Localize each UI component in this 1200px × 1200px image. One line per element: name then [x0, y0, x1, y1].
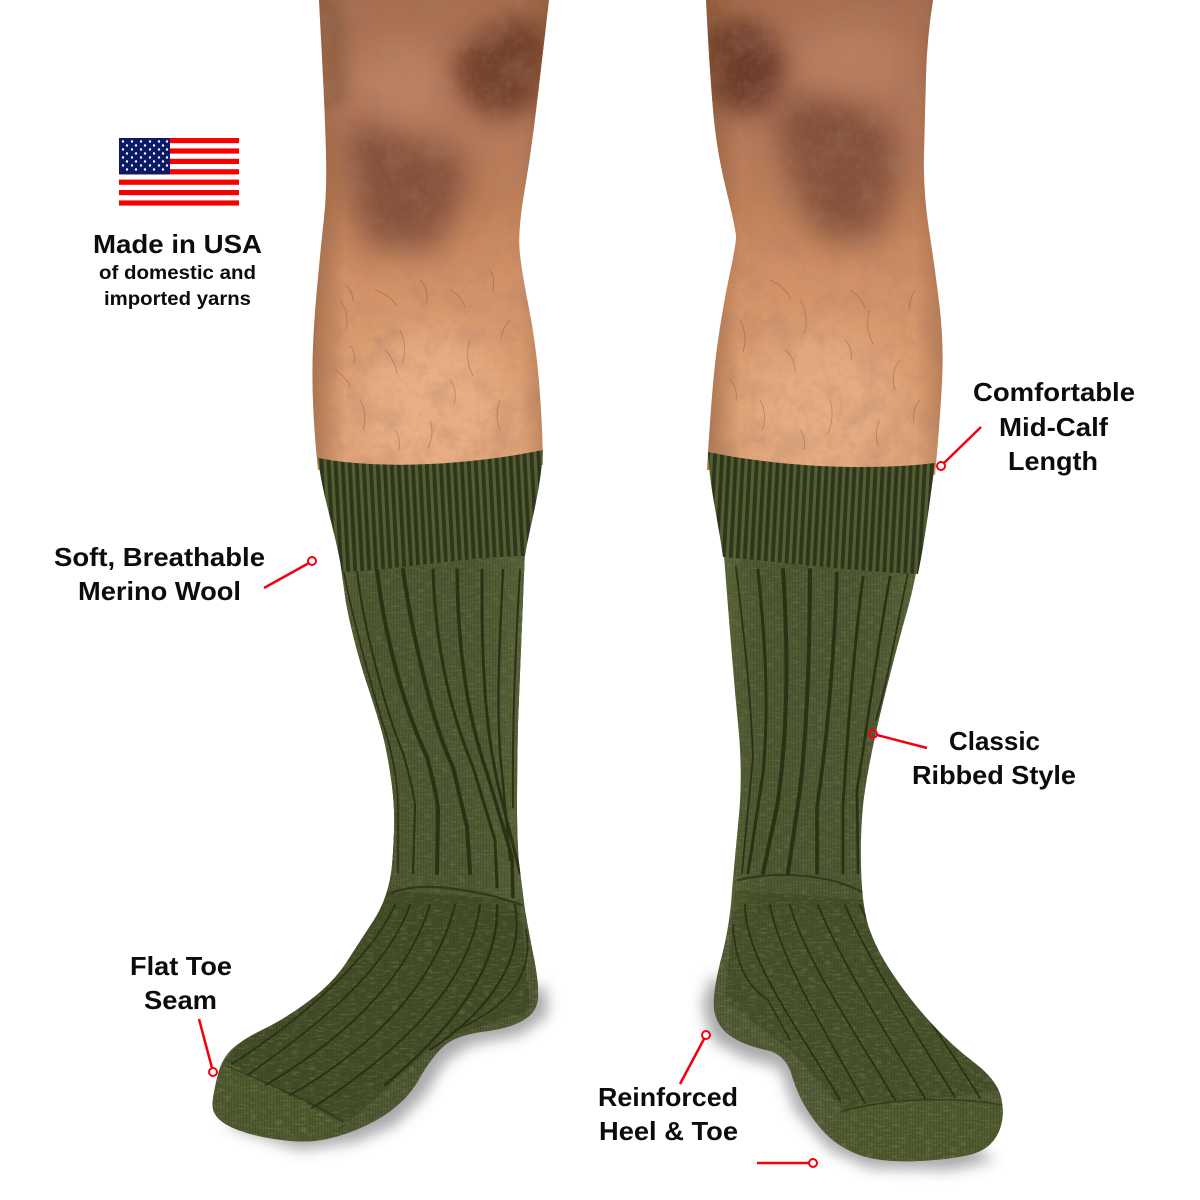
- icon: american flag: [119, 138, 239, 206]
- callout: soft breathable merino wool: Merino Wool: [78, 576, 241, 606]
- left sock ribs: [227, 567, 528, 1122]
- text: made in usa: imported yarns: [104, 289, 251, 310]
- callout: classic ribbed style: Ribbed Style: [912, 760, 1076, 790]
- callout: reinforced heel and toe: Heel & Toe: [599, 1116, 738, 1146]
- text: made in usa: Made in USA: [93, 229, 262, 259]
- callout: flat toe seam: Seam: [144, 985, 217, 1015]
- callout: flat toe seam: Flat Toe: [130, 951, 232, 981]
- left foot shadow: [225, 985, 548, 1150]
- callout: comfortable mid-calf length: [937, 377, 1135, 476]
- callout: soft breathable merino wool: [54, 542, 316, 606]
- right sock body: [714, 557, 1003, 1162]
- left sock cuff: [318, 450, 543, 572]
- right sock cuff: [708, 452, 935, 574]
- left sock body: [212, 556, 538, 1142]
- left leg: [312, 0, 549, 470]
- callout: classic ribbed style: Classic: [949, 726, 1040, 756]
- callout: soft breathable merino wool: Soft, Breathable: [54, 542, 265, 572]
- callout: comfortable mid-calf length: Mid-Calf: [999, 412, 1108, 442]
- text: made in usa: [93, 229, 262, 310]
- right sock: [700, 452, 1020, 1170]
- callout: classic ribbed style: [869, 726, 1076, 790]
- callout: reinforced heel and toe: [598, 1031, 817, 1167]
- right leg: [700, 0, 960, 480]
- callout: comfortable mid-calf length: Length: [1008, 446, 1098, 476]
- callout: flat toe seam: [130, 951, 232, 1076]
- left sock: [200, 450, 550, 1160]
- right foot shadow: [702, 975, 995, 1170]
- right sock ribs: [733, 567, 1002, 1112]
- callout: comfortable mid-calf length: Comfortable: [973, 377, 1135, 407]
- text: made in usa: of domestic and: [99, 263, 256, 284]
- callout: reinforced heel and toe: Reinforced: [598, 1082, 738, 1112]
